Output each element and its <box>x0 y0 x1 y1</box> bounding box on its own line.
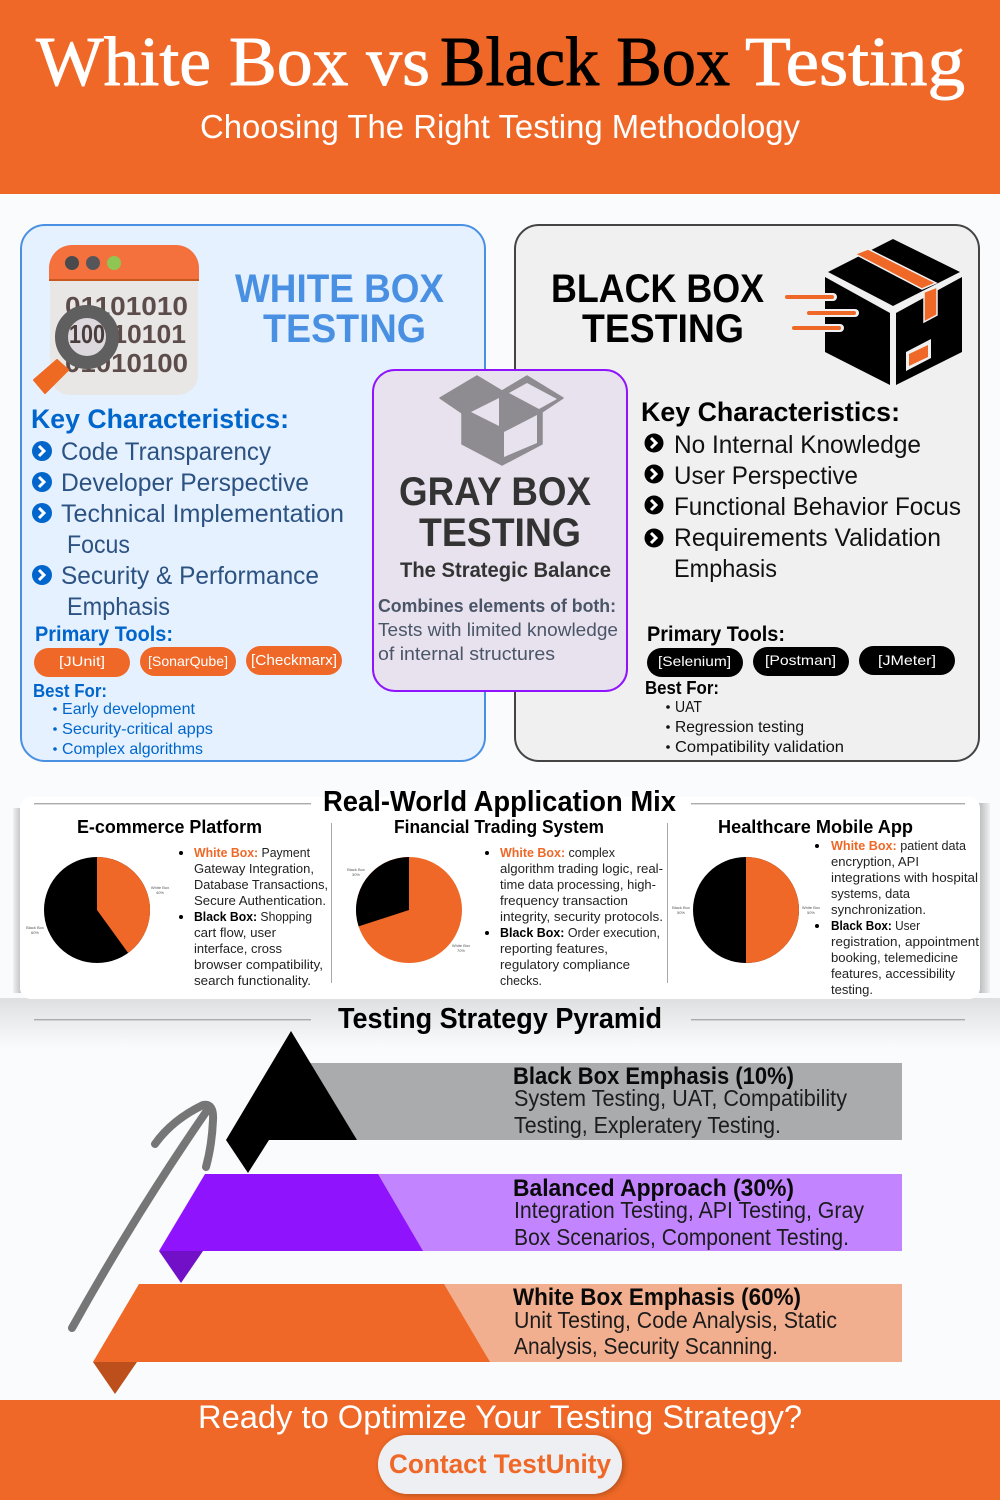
description: gray box <box>378 596 618 664</box>
best for: black box: Best For: <box>645 678 719 698</box>
use cases: financial: algorithm trading logic, real- <box>500 861 663 876</box>
key characteristics: black box: Emphasis <box>674 555 777 583</box>
icon: code window with magnifier: 100 <box>69 319 105 349</box>
heading: white box testing <box>235 267 444 351</box>
use cases: healthcare: integrations with hospital <box>831 870 978 885</box>
tier: black box emphasis <box>226 1031 902 1173</box>
heading: black box testing <box>551 267 764 351</box>
icon: code window with magnifier: 01010100 <box>65 348 188 378</box>
use cases: healthcare: features, accessibility <box>831 966 955 981</box>
key characteristics: white box: Developer Perspective <box>61 469 309 497</box>
title: Testing <box>745 24 965 101</box>
primary tools: white box: [Checkmarx] <box>251 652 337 669</box>
tier: white box emphasis <box>93 1284 902 1394</box>
use cases: healthcare: synchronization. <box>831 902 926 917</box>
icon: black parcel box <box>787 239 962 385</box>
pie chart: e-commerce: 40% <box>156 890 164 895</box>
key characteristics: black box: Functional Behavior Focus <box>674 493 961 521</box>
panel: white box testing <box>21 225 485 761</box>
key characteristics: white box <box>31 404 344 621</box>
key characteristics: white box: Code Transparency <box>61 438 271 466</box>
title: Black Box <box>440 24 730 101</box>
best for: black box: Compatibility validation <box>675 739 844 756</box>
use cases: e-commerce: Black Box: Shopping <box>194 909 312 924</box>
pie chart: healthcare: Black Box <box>672 905 690 910</box>
best for: white box: Security-critical apps <box>62 721 213 738</box>
pie chart: financial: White Box <box>452 943 470 948</box>
button: contact testunity <box>378 1435 622 1494</box>
key characteristics: white box: Key Characteristics: <box>31 404 289 434</box>
pie chart: e-commerce: Black Box <box>26 925 44 930</box>
use cases: financial: reporting features, <box>500 941 608 956</box>
use cases: e-commerce: browser compatibility, <box>194 957 323 972</box>
use cases: financial: regulatory compliance <box>500 957 630 972</box>
use cases: financial: checks. <box>500 973 542 988</box>
heading: white box testing: WHITE BOX <box>235 267 444 311</box>
use cases: healthcare: Black Box: User <box>831 918 921 933</box>
heading: real-world application mix: Real-World Application Mix <box>323 786 676 818</box>
key characteristics: white box: Technical Implementation <box>61 500 344 528</box>
key characteristics: black box <box>641 397 961 583</box>
use cases: e-commerce: White Box: Payment <box>194 845 310 860</box>
case: financial trading system <box>347 817 663 988</box>
tier: white box emphasis: White Box Emphasis (60%) <box>513 1284 801 1311</box>
use cases: healthcare: testing. <box>831 982 873 997</box>
case: healthcare mobile app <box>672 817 979 997</box>
key characteristics: black box: Requirements Validation <box>674 524 941 552</box>
heading: white box testing: TESTING <box>263 307 426 351</box>
primary tools: white box: Primary Tools: <box>35 623 173 646</box>
key characteristics: white box: Security & Performance <box>61 562 319 590</box>
tier: black box emphasis: Black Box Emphasis (10%) <box>513 1063 794 1090</box>
arrow: upward <box>72 1105 213 1328</box>
use cases: healthcare <box>815 838 979 997</box>
use cases: e-commerce: Gateway Integration, <box>194 861 314 876</box>
primary tools: white box: [JUnit] <box>59 653 105 669</box>
use cases: healthcare: registration, appointment <box>831 934 979 949</box>
panel: black box testing <box>515 225 979 761</box>
icon: code window with magnifier: 10010101 <box>68 319 186 349</box>
best for: white box: Early development <box>62 701 196 718</box>
pie chart: healthcare: 50% <box>807 910 815 915</box>
key characteristics: white box: Focus <box>67 531 130 559</box>
use cases: financial: White Box: complex <box>500 845 615 860</box>
tier: balanced approach: Balanced Approach (30%) <box>513 1175 794 1202</box>
primary tools: black box: [Selenium] <box>658 653 731 669</box>
icon: code window with magnifier <box>34 245 199 395</box>
use cases: e-commerce: Secure Authentication. <box>194 893 326 908</box>
title <box>36 24 965 101</box>
pie chart: e-commerce <box>26 857 169 963</box>
header banner <box>0 0 1000 194</box>
use cases: financial <box>485 845 663 988</box>
description: gray box: of internal structures <box>378 644 555 664</box>
call to action text: Ready to Optimize Your Testing Strategy? <box>198 1399 802 1435</box>
icon: code window with magnifier: 01101010 <box>65 291 188 321</box>
case: healthcare mobile app: Healthcare Mobile App <box>718 817 913 837</box>
use cases: healthcare: booking, telemedicine <box>831 950 958 965</box>
section: testing strategy pyramid <box>34 1003 965 1394</box>
pie chart: e-commerce: 60% <box>31 930 39 935</box>
tier: black box emphasis: Testing, Expleratery Testing. <box>514 1112 781 1138</box>
best for: black box <box>645 678 844 756</box>
pie chart: financial: 30% <box>352 872 360 877</box>
primary tools: white box: [SonarQube] <box>148 653 228 669</box>
case: e-commerce platform <box>26 817 328 988</box>
pie chart: healthcare: 50% <box>677 910 685 915</box>
tier: black box emphasis: System Testing, UAT, Compatibility <box>514 1085 847 1111</box>
subtitle: Choosing The Right Testing Methodology <box>200 108 800 145</box>
footer banner <box>0 1399 1000 1500</box>
tier: balanced approach: Box Scenarios, Component Testing. <box>514 1224 849 1250</box>
key characteristics: black box: No Internal Knowledge <box>674 431 921 459</box>
heading: black box testing: BLACK BOX <box>551 267 764 311</box>
key characteristics: black box: User Perspective <box>674 462 858 490</box>
use cases: e-commerce: interface, cross <box>194 941 282 956</box>
primary tools: black box: [Postman] <box>765 652 836 668</box>
use cases: e-commerce: Database Transactions, <box>194 877 328 892</box>
use cases: healthcare: systems, data <box>831 886 911 901</box>
description: gray box: Tests with limited knowledge <box>378 620 618 640</box>
case: financial trading system: Financial Trading System <box>394 817 604 837</box>
subheading: the strategic balance: The Strategic Balance <box>400 559 611 582</box>
pie chart: financial <box>347 857 470 963</box>
best for: white box <box>33 681 213 758</box>
best for: white box: Best For: <box>33 681 107 701</box>
heading: gray box testing <box>399 470 591 555</box>
section: real-world application mix <box>0 786 1000 1048</box>
panel: gray box testing <box>373 370 627 691</box>
pie chart: healthcare <box>672 857 820 963</box>
use cases: financial: Black Box: Order execution, <box>500 925 660 940</box>
tier: white box emphasis: Unit Testing, Code Analysis, Static <box>514 1307 837 1333</box>
use cases: healthcare: White Box: patient data <box>831 838 967 853</box>
best for: black box: Regression testing <box>675 719 804 736</box>
primary tools: black box: Primary Tools: <box>647 623 785 646</box>
primary tools: black box <box>647 623 955 677</box>
description: gray box: Combines elements of both: <box>378 596 616 616</box>
pie chart: healthcare: White Box <box>802 905 820 910</box>
use cases: healthcare: encryption, API <box>831 854 919 869</box>
heading: gray box testing: TESTING <box>419 511 581 555</box>
best for: black box: UAT <box>675 699 702 716</box>
tier: white box emphasis: Analysis, Security Scanning. <box>514 1333 778 1359</box>
use cases: e-commerce: search functionality. <box>194 973 311 988</box>
use cases: financial: integrity, security protocols. <box>500 909 663 924</box>
button: contact testunity: Contact TestUnity <box>389 1449 611 1479</box>
heading: testing strategy pyramid: Testing Strategy Pyramid <box>338 1003 662 1035</box>
use cases: e-commerce <box>179 845 328 988</box>
tier: balanced approach <box>159 1174 902 1283</box>
use cases: financial: time data processing, high- <box>500 877 656 892</box>
key characteristics: white box: Emphasis <box>67 593 170 621</box>
tier: balanced approach: Integration Testing, API Testing, Gray <box>514 1197 864 1223</box>
pie chart: financial: Black Box <box>347 867 365 872</box>
primary tools: black box: [JMeter] <box>878 652 936 668</box>
use cases: e-commerce: cart flow, user <box>194 925 277 940</box>
case: e-commerce platform: E-commerce Platform <box>77 817 262 837</box>
pie chart: financial: 70% <box>457 948 465 953</box>
pie chart: e-commerce: White Box <box>151 885 169 890</box>
primary tools: white box <box>34 623 342 677</box>
title: White Box vs <box>36 24 430 101</box>
best for: white box: Complex algorithms <box>62 741 203 758</box>
key characteristics: black box: Key Characteristics: <box>641 397 900 427</box>
icon: open gray box <box>440 376 563 465</box>
heading: black box testing: TESTING <box>582 307 744 351</box>
use cases: financial: frequency transaction <box>500 893 628 908</box>
heading: gray box testing: GRAY BOX <box>399 470 591 514</box>
